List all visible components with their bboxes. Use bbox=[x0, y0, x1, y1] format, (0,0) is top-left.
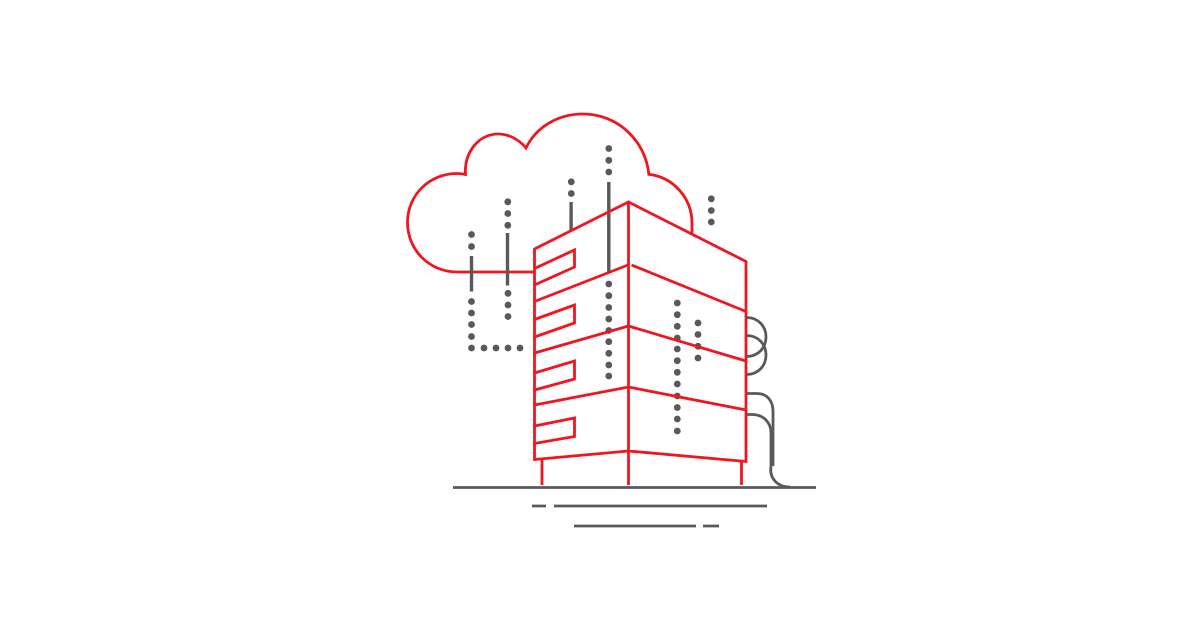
fourth connector dots bbox=[605, 145, 612, 379]
ground lines bbox=[453, 488, 816, 526]
pipes bbox=[746, 318, 790, 487]
second connector dots bbox=[504, 198, 511, 320]
building legs bbox=[542, 459, 742, 485]
building outline bbox=[534, 202, 746, 462]
floor bands bbox=[534, 265, 746, 312]
lower dashes bbox=[574, 525, 719, 527]
looped cables bbox=[746, 318, 766, 356]
upper right dots bbox=[708, 195, 715, 225]
left connector dots bbox=[468, 231, 523, 351]
windows bbox=[534, 250, 574, 285]
long dot column bbox=[674, 300, 681, 434]
dotted connector lines bbox=[468, 145, 715, 434]
icon: cloud outline bbox=[408, 114, 692, 272]
ground line bbox=[453, 486, 816, 489]
short dot column bbox=[695, 320, 701, 361]
centre corner edge bbox=[627, 202, 630, 485]
bent pipes bbox=[746, 394, 773, 466]
upper dashes bbox=[532, 505, 767, 507]
third connector dots bbox=[568, 178, 575, 231]
building bbox=[534, 202, 746, 485]
